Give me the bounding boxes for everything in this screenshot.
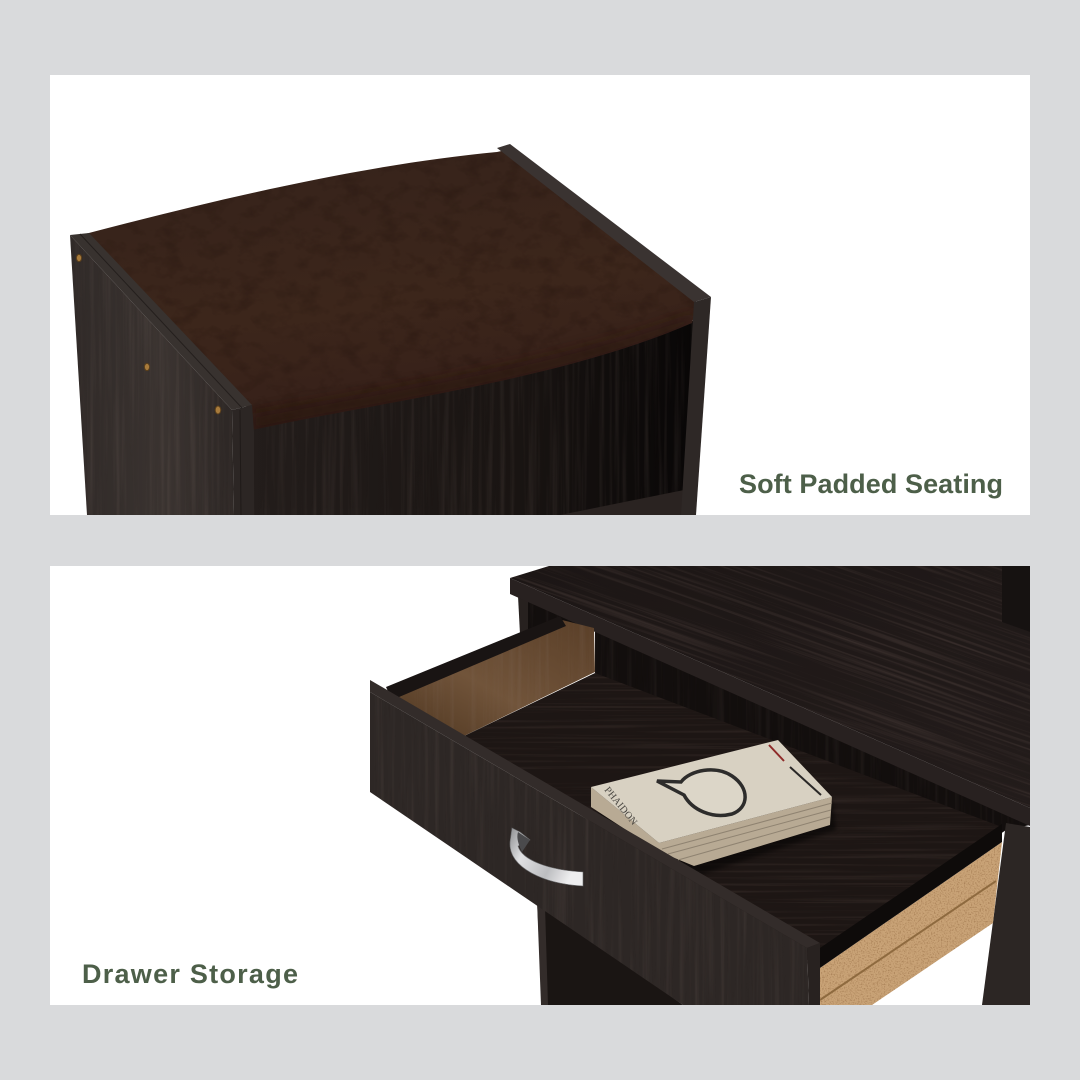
cork drawer side — [815, 824, 1005, 1005]
image: open drawer — [370, 566, 1030, 1005]
right leg — [982, 823, 1030, 1005]
drawer handle — [510, 828, 583, 886]
drawer floor — [460, 673, 1004, 966]
brass screws — [76, 254, 221, 414]
desk top surface — [510, 566, 1030, 826]
label: soft padded seating: Soft Padded Seating — [739, 469, 1003, 499]
book cover — [591, 740, 832, 843]
velvet seat cushion — [85, 145, 700, 435]
cabinet back interior — [518, 598, 1029, 833]
drawer rear wall — [386, 615, 600, 740]
panel: drawer storage — [50, 566, 1030, 1005]
mirror post — [1002, 566, 1030, 632]
bench interior — [240, 320, 700, 515]
lower leg under drawer — [537, 900, 683, 1005]
bench right edge strip — [497, 144, 711, 515]
image: bench seat — [60, 144, 711, 515]
bench side panel — [70, 235, 234, 515]
publisher name: PHAIDON — [602, 785, 639, 828]
speech bubble mark — [657, 770, 745, 815]
spine title marks — [769, 745, 821, 795]
drawer front panel — [365, 680, 820, 1005]
book shadow — [595, 800, 836, 875]
label: drawer storage: Drawer Storage — [82, 959, 298, 989]
book — [591, 740, 832, 866]
bench left edge strip — [70, 233, 254, 515]
panel: soft padded seating — [50, 75, 1030, 515]
book pages — [591, 787, 832, 866]
